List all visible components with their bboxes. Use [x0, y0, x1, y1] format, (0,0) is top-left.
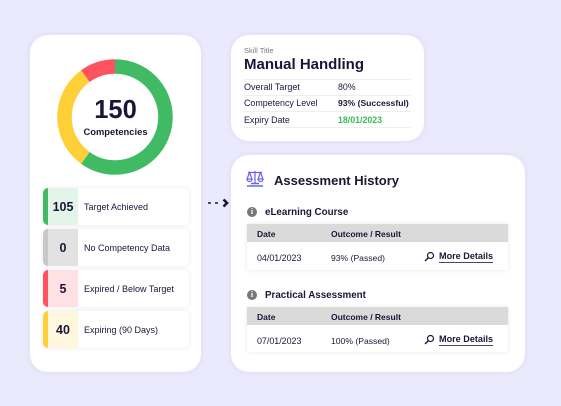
- skill details text: 18/01/2023: [338, 115, 382, 125]
- row: expired: Expired / Below Target: [84, 284, 174, 294]
- donut chart: [57, 59, 173, 175]
- table: practical assessment: [247, 307, 508, 352]
- row: target achieved: Target Achieved: [84, 202, 148, 212]
- heading: assessment history: Assessment History: [274, 173, 399, 188]
- skill details text: Expiry Date: [244, 115, 290, 125]
- skill details text: Skill Title: [244, 46, 274, 55]
- row: expired: 5: [60, 282, 66, 296]
- row: no competency data: No Competency Data: [84, 243, 170, 253]
- panel: skill details: [231, 35, 424, 141]
- icon: info: i: [251, 207, 253, 216]
- row: expiring: 40: [56, 323, 70, 337]
- table: elearning course: More Details: [439, 251, 493, 261]
- skill details text: 93% (Successful): [338, 98, 409, 108]
- table: practical assessment: Outcome / Result: [331, 312, 401, 322]
- donut total: [83, 96, 148, 137]
- heading: elearning course: eLearning Course: [265, 207, 348, 218]
- donut total: 150: [94, 96, 137, 124]
- arrow: [208, 198, 229, 208]
- table: elearning course: 93% (Passed): [331, 253, 385, 263]
- row: expired: [43, 270, 189, 307]
- icon: scales: [246, 171, 264, 187]
- skill details text: 80%: [338, 82, 356, 92]
- skill details text: Overall Target: [244, 82, 300, 92]
- panel: assessment history: [231, 155, 525, 372]
- row: no competency data: [43, 229, 189, 266]
- icon: info: i: [251, 290, 253, 299]
- row: expiring: [43, 311, 189, 348]
- table: elearning course: 04/01/2023: [257, 253, 301, 263]
- heading: practical assessment: Practical Assessment: [265, 290, 366, 301]
- skill details text: Competency Level: [244, 98, 318, 108]
- donut total: Competencies: [83, 126, 148, 137]
- skill details text: Manual Handling: [244, 56, 364, 73]
- row: target achieved: [43, 188, 189, 225]
- icon: info: [247, 207, 257, 217]
- table: practical assessment: More Details: [439, 334, 493, 344]
- table: elearning course: [247, 224, 508, 270]
- skill details text: [244, 46, 409, 125]
- table: practical assessment: 07/01/2023: [257, 336, 301, 346]
- row: target achieved: 105: [53, 200, 73, 214]
- icon: info: [247, 290, 257, 300]
- table: practical assessment: 100% (Passed): [331, 336, 390, 346]
- row: expiring: Expiring (90 Days): [84, 325, 158, 335]
- table: practical assessment: Date: [257, 312, 275, 322]
- row: no competency data: 0: [60, 241, 66, 255]
- table: elearning course: Outcome / Result: [331, 229, 401, 239]
- table: elearning course: Date: [257, 229, 275, 239]
- panel: competencies summary: [30, 35, 201, 372]
